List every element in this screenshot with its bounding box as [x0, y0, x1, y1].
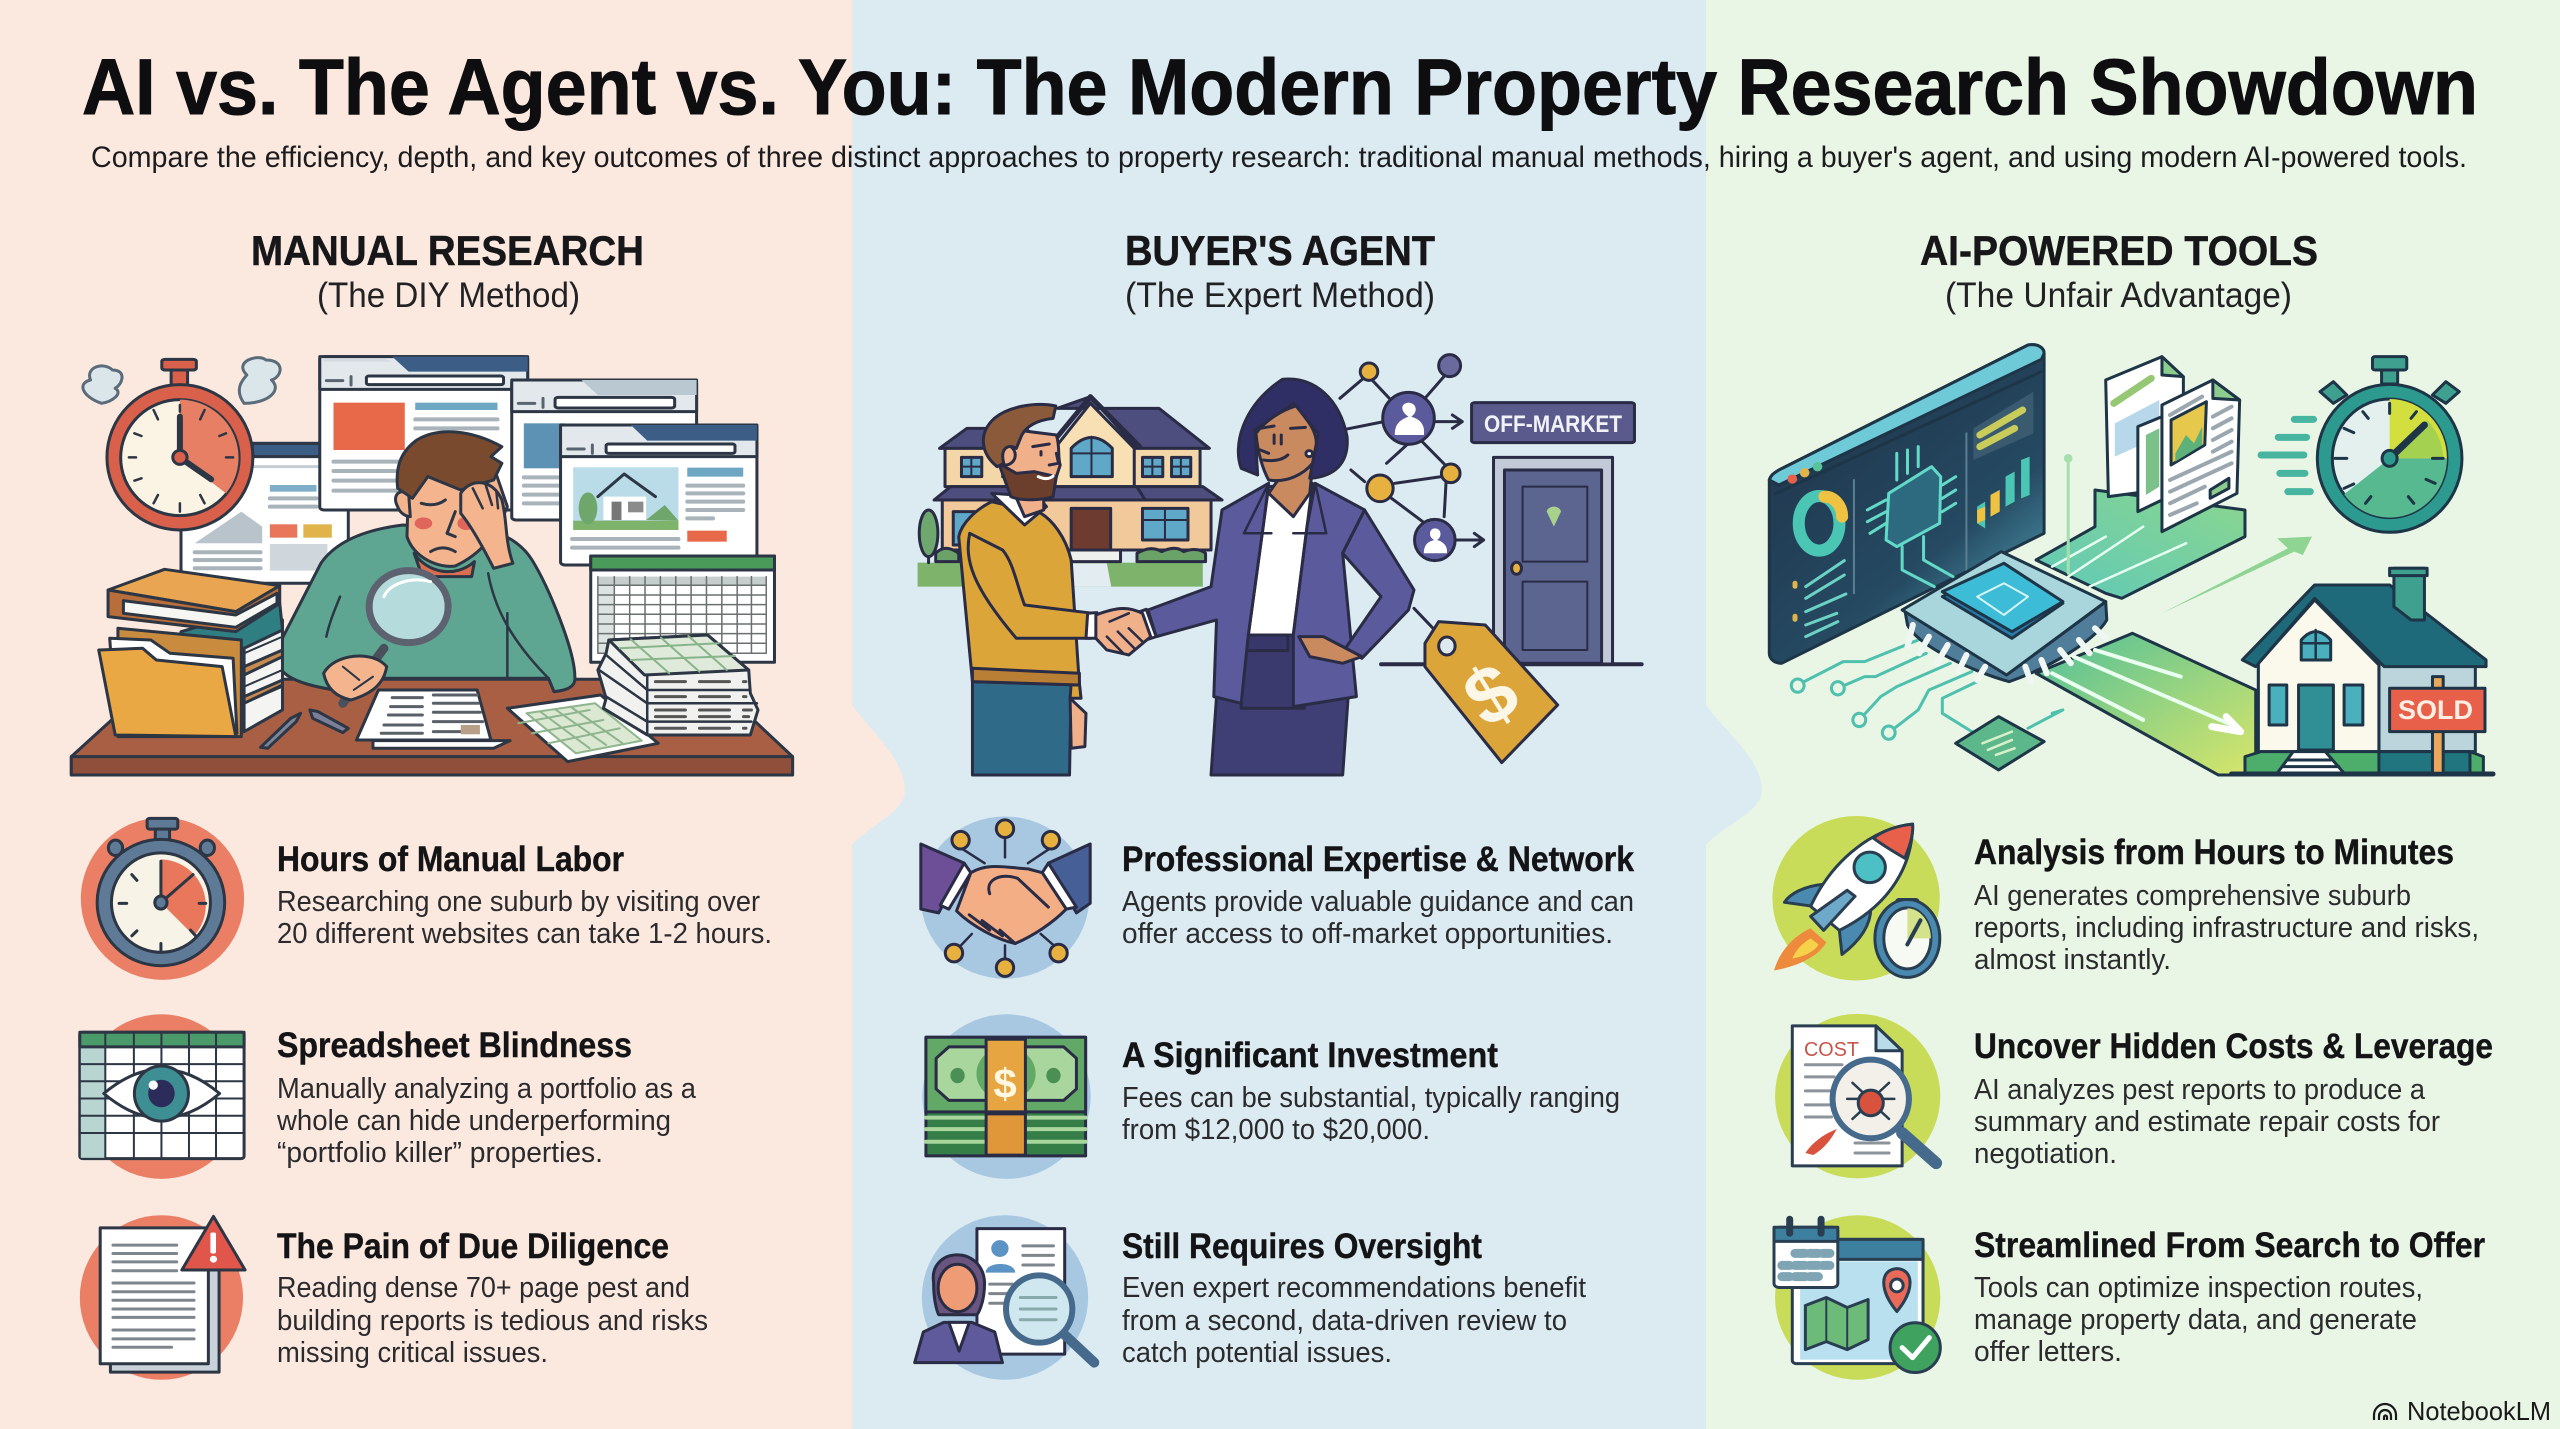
- text: Analysis from Hours to Minutes: reports, including infrastructure and risks,: [1974, 912, 2479, 944]
- paper on desk: [357, 690, 510, 748]
- circuit traces: [1791, 640, 2063, 739]
- fast stopwatch: [2261, 357, 2462, 532]
- browser window: center: [320, 357, 528, 510]
- icon: rocket with stopwatch: [1772, 816, 1940, 981]
- column: manual research icons: [80, 818, 245, 1380]
- green arrow to stopwatch: [2162, 537, 2312, 613]
- heading: manual research: [251, 227, 644, 315]
- data stream band to documents: [2036, 454, 2245, 598]
- text: Still Requires Oversight: catch potential issues.: [1122, 1337, 1392, 1369]
- text: Streamlined From Search to Offer: manage property data, and generate: [1974, 1304, 2417, 1336]
- text: Uncover Hidden Costs & Leverage: [1974, 1027, 2493, 1170]
- text: Streamlined From Search to Offer: [1974, 1226, 2485, 1368]
- agent in purple suit: [1148, 379, 1414, 775]
- text: Uncover Hidden Costs & Leverage: summary and estimate repair costs for: [1974, 1106, 2440, 1138]
- heading: buyer's agent: BUYER'S AGENT: [1125, 227, 1435, 274]
- spreadsheet paper on desk: [507, 695, 658, 762]
- text: Analysis from Hours to Minutes: AI generates comprehensive suburb: [1974, 880, 2411, 912]
- icon: stack of money: [922, 1014, 1091, 1179]
- text: Professional Expertise & Network: offer access to off-market opportunities.: [1122, 918, 1613, 950]
- text: Still Requires Oversight: [1122, 1227, 1586, 1369]
- NotebookLM logo: NotebookLM: [2407, 1396, 2551, 1426]
- text: Streamlined From Search to Offer: offer letters.: [1974, 1336, 2122, 1368]
- browser window: front with house listing: [561, 425, 757, 565]
- text: Spreadsheet Blindness: [276, 1026, 697, 1169]
- binders and folder: [99, 569, 282, 737]
- sold sign text: SOLD: [2398, 695, 2473, 725]
- text: The Pain of Due Diligence: [277, 1227, 708, 1369]
- heading: buyer's agent: [1125, 227, 1435, 315]
- text: The Pain of Due Diligence: building reports is tedious and risks: [277, 1305, 708, 1337]
- text: Analysis from Hours to Minutes: almost instantly.: [1974, 944, 2171, 976]
- cost label: COST: [1804, 1039, 1859, 1061]
- browser window: back left: [181, 443, 348, 583]
- text: A Significant Investment: [1122, 1036, 1620, 1146]
- man in yellow sweater: [959, 404, 1093, 775]
- heading: AI-powered tools: [1920, 227, 2318, 315]
- small chip: [1956, 717, 2044, 770]
- handshake hands: [1086, 608, 1156, 655]
- text: Hours of Manual Labor: [277, 840, 772, 950]
- text: Uncover Hidden Costs & Leverage: negotiation.: [1974, 1138, 2117, 1170]
- illustration: AI chip connecting dashboard, reports, stopwatch and sold house: [1769, 345, 2493, 775]
- price tag shape: [1414, 608, 1558, 763]
- text: Uncover Hidden Costs & Leverage: Uncover Hidden Costs & Leverage: [1974, 1027, 2493, 1066]
- icon: cost report under magnifier: [1775, 1014, 1940, 1178]
- text: A Significant Investment: Fees can be substantial, typically ranging: [1122, 1082, 1620, 1114]
- data beam to sold house: [2036, 633, 2256, 775]
- text: Uncover Hidden Costs & Leverage: AI analyzes pest reports to produce a: [1974, 1074, 2426, 1106]
- desk: [71, 679, 793, 775]
- icon: stopwatch with steam: [83, 358, 280, 530]
- icon: dense report with warning: [80, 1215, 245, 1380]
- text: Streamlined From Search to Offer: Streamlined From Search to Offer: [1974, 1226, 2485, 1265]
- off-market label box: [1472, 403, 1634, 443]
- text: Hours of Manual Labor: Researching one suburb by visiting over: [277, 886, 760, 918]
- off-market door: [1381, 457, 1642, 664]
- subtitle: Compare the efficiency, depth, and key outcomes of three distinct approaches to property research: traditional manual methods, hiring a buyer's agent, and using modern AI-powered tools.: [91, 141, 2467, 174]
- spreadsheet window: [591, 556, 774, 662]
- heading: AI-powered tools: AI-POWERED TOOLS: [1920, 227, 2318, 274]
- icon: calendar, map, pin and check: [1774, 1215, 1940, 1380]
- heading: AI-powered tools: (The Unfair Advantage): [1945, 276, 2292, 315]
- text: Still Requires Oversight: Even expert recommendations benefit: [1122, 1272, 1586, 1304]
- text: Professional Expertise & Network: Professional Expertise & Network: [1122, 840, 1634, 879]
- man: body in green sweater: [277, 432, 575, 692]
- text: The Pain of Due Diligence: Reading dense 70+ page pest and: [277, 1272, 690, 1304]
- text: Analysis from Hours to Minutes: [1974, 833, 2479, 976]
- sold house: [2232, 568, 2493, 774]
- heading: buyer's agent: (The Expert Method): [1125, 276, 1435, 315]
- text: Hours of Manual Labor: Hours of Manual Labor: [277, 840, 624, 879]
- icon: spreadsheet with eye: [80, 1014, 244, 1179]
- text: Spreadsheet Blindness: “portfolio killer” properties.: [277, 1137, 603, 1169]
- text: Professional Expertise & Network: [1122, 840, 1634, 950]
- heading: manual research: MANUAL RESEARCH: [251, 227, 644, 274]
- network of contacts: [1340, 355, 1484, 561]
- AI processor chip: [1902, 552, 2107, 682]
- text: Streamlined From Search to Offer: Tools can optimize inspection routes,: [1974, 1272, 2423, 1304]
- icon: handshake network: [921, 816, 1090, 979]
- text: Hours of Manual Labor: 20 different websites can take 1-2 hours.: [277, 918, 772, 950]
- text: The Pain of Due Diligence: The Pain of Due Diligence: [277, 1227, 669, 1266]
- text: Professional Expertise & Network: Agents provide valuable guidance and can: [1122, 886, 1634, 918]
- illustration: client and buyer's agent shaking hands: [918, 355, 1642, 775]
- report documents: [2106, 357, 2240, 532]
- off-market label text: OFF-MARKET: [1484, 411, 1622, 438]
- magnifying glass and hand: [324, 571, 448, 703]
- text: Spreadsheet Blindness: whole can hide underperforming: [276, 1105, 671, 1137]
- column: buyer's agent icons: [915, 816, 1094, 1380]
- dashboard screen: [1769, 345, 2044, 663]
- stack of printed spreadsheets: [598, 635, 758, 735]
- heading: manual research: (The DIY Method): [317, 276, 580, 315]
- pens: [261, 710, 348, 748]
- text: A Significant Investment: from $12,000 to $20,000.: [1122, 1114, 1430, 1146]
- text: A Significant Investment: A Significant Investment: [1122, 1036, 1498, 1075]
- panel: buyer's agent background: [0, 0, 1762, 1429]
- illustration: overwhelmed man researching at desk: [71, 357, 793, 775]
- text: Still Requires Oversight: Still Requires Oversight: [1122, 1227, 1482, 1266]
- price tag dollar sign: $: [1448, 645, 1533, 744]
- panel: manual research background: [0, 0, 905, 1429]
- column: AI tools icons: [1772, 816, 1940, 1380]
- icon: agent reviewing document: [915, 1215, 1094, 1380]
- money dollar sign: $: [993, 1060, 1017, 1107]
- text: Still Requires Oversight: from a second, data-driven review to: [1122, 1305, 1567, 1337]
- house behind handshake: [918, 397, 1222, 587]
- text: Spreadsheet Blindness: Spreadsheet Blindness: [277, 1026, 632, 1065]
- text: The Pain of Due Diligence: missing critical issues.: [277, 1337, 548, 1369]
- text: Spreadsheet Blindness: Manually analyzing a portfolio as a: [277, 1073, 697, 1105]
- text: Analysis from Hours to Minutes: Analysis from Hours to Minutes: [1974, 833, 2454, 872]
- icon: stopwatch: [81, 818, 244, 980]
- browser window: back right: [512, 380, 697, 520]
